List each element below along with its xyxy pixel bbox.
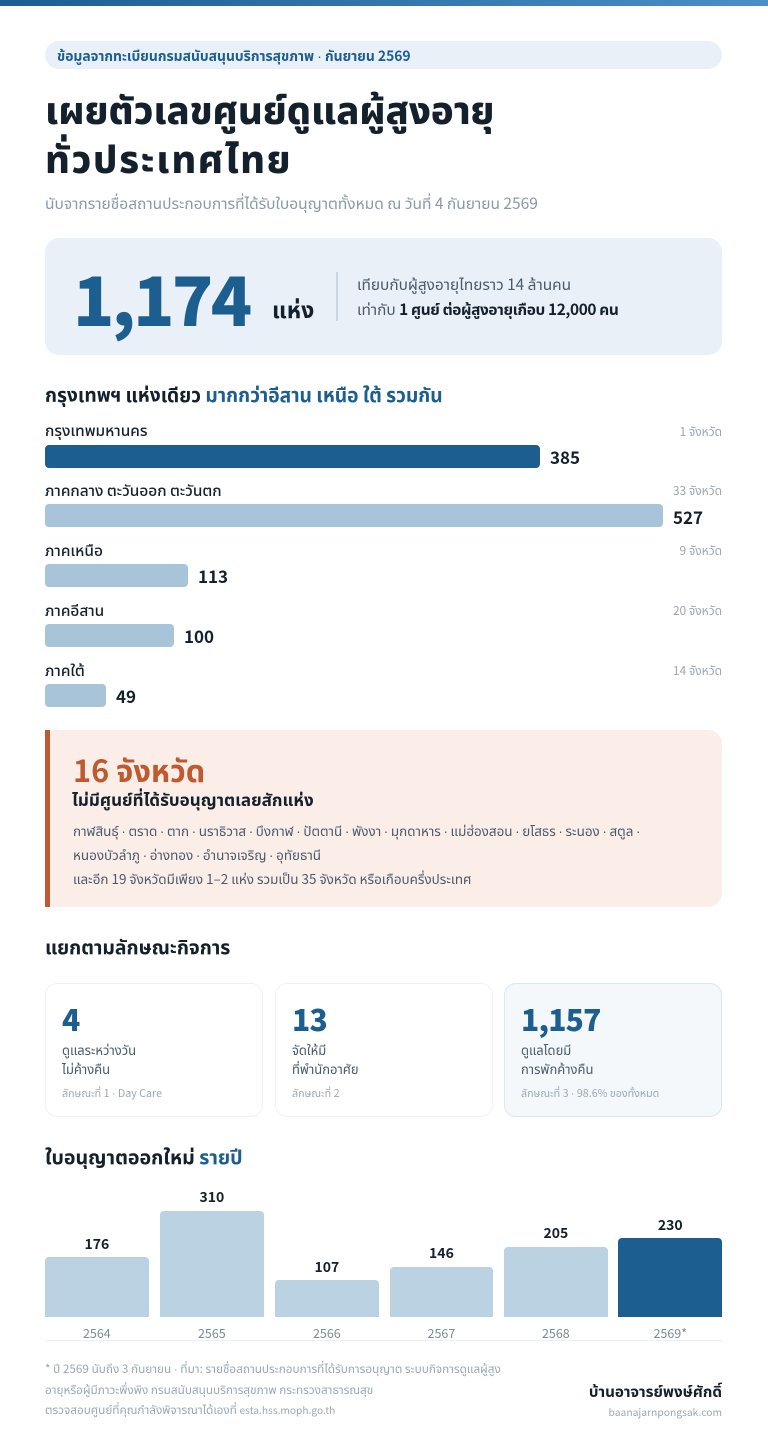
row: North [45, 539, 722, 588]
title: เผยตัวเลขศูนย์ดูแลผู้สูงอายุ [45, 80, 494, 135]
row: North: 9 จังหวัด [679, 542, 722, 559]
card: overnight: 1,157 [521, 996, 601, 1040]
divider note: เทียบกับผู้สูงอายุไทยราว 14 ล้านคน [357, 273, 571, 295]
row: Isan: 100 [184, 623, 214, 648]
source tag: ข้อมูลจากทะเบียนกรมสนับสนุนบริการสุขภาพ · กันยายน 2569 [57, 45, 411, 65]
footnote [45, 1360, 501, 1418]
column chart: yearly licences: 205 [543, 1223, 568, 1243]
row: Central: 33 จังหวัด [673, 482, 722, 499]
heading: yearly: ใบอนุญาตออกใหม่ รายปี [45, 1141, 243, 1170]
column 2566 [275, 1257, 379, 1342]
row: Isan [45, 599, 722, 648]
card: day care: 4 [62, 996, 79, 1040]
row: Central: ภาคกลาง ตะวันออก ตะวันตก [45, 479, 222, 501]
row: South [45, 659, 722, 708]
column chart: yearly licences: 146 [429, 1243, 454, 1263]
callout: provinces without centres [45, 730, 722, 907]
column 2568 [504, 1223, 608, 1342]
brand name: บ้านอาจารย์พงษ์ศักดิ์ [589, 1380, 722, 1402]
footnote: ตรวจสอบศูนย์ที่คุณกำลังพิจารณาได้เองที่ esta.hss.moph.go.th [45, 1401, 335, 1418]
province list: กาฬสินธุ์ · ตราด · ตาก · นราธิวาส · บึงกาฬ · ปัตตานี · พังงา · มุกดาหาร · แม่ฮ่องสอน · ยโสธร · ระนอง · สตูล · [73, 820, 640, 840]
title [45, 80, 494, 184]
divider note: เท่ากับ 1 ศูนย์ ต่อผู้สูงอายุเกือบ 12,000 คน [357, 298, 618, 320]
footnote: อายุหรือผู้มีภาวะพึ่งพิง กรมสนับสนุนบริการสุขภาพ กระทรวงสาธารณสุข [45, 1381, 373, 1398]
heading: business type: แยกตามลักษณะกิจการ [45, 931, 230, 960]
column 2567 [390, 1243, 493, 1342]
column chart: yearly licences: 107 [314, 1257, 339, 1277]
column chart: yearly licences: 310 [199, 1187, 224, 1207]
row: Central [45, 479, 722, 529]
callout heading: ไม่มีศูนย์ที่ได้รับอนุญาตเลยสักแห่ง [72, 786, 314, 811]
row: North: ภาคเหนือ [45, 539, 103, 561]
column chart: yearly licences: 2566 [313, 1323, 341, 1342]
column 2565 [160, 1187, 264, 1342]
row: South: 49 [116, 683, 136, 708]
title: ทั่วประเทศไทย [45, 129, 292, 184]
column chart: yearly licences: 2565 [198, 1323, 226, 1342]
card: residence: จัดให้มี [292, 1040, 326, 1059]
card: residence: ลักษณะที่ 2 [292, 1086, 340, 1101]
card: day care: ลักษณะที่ 1 · Day Care [62, 1086, 162, 1101]
row: Bangkok: 1 จังหวัด [679, 423, 722, 440]
card: overnight: ดูแลโดยมี [521, 1040, 571, 1059]
card: day care [45, 983, 263, 1117]
card: residence: ที่พำนักอาศัย [292, 1059, 359, 1078]
column 2569 [618, 1215, 722, 1342]
column chart: yearly licences: 2567 [428, 1323, 455, 1342]
column chart: yearly licences: 176 [84, 1234, 109, 1254]
province list [73, 820, 640, 888]
column chart: yearly licences: 2564 [83, 1323, 111, 1342]
bar chart: regions [45, 419, 722, 708]
province list: และอีก 19 จังหวัดมีเพียง 1–2 แห่ง รวมเป็น 35 จังหวัด หรือเกือบครึ่งประเทศ [73, 868, 472, 888]
subtitle: นับจากรายชื่อสถานประกอบการที่ได้รับใบอนุญาตทั้งหมด ณ วันที่ 4 กันยายน 2569 [45, 192, 538, 214]
footnote: * ปี 2569 นับถึง 3 กันยายน · ที่มา: รายชื่อสถานประกอบการที่ได้รับการอนุญาต ระบบกิจการดูแลผู้สูง [45, 1360, 501, 1377]
row: Isan: ภาคอีสาน [45, 599, 104, 621]
row: Bangkok: 385 [550, 444, 580, 469]
panel: headline total [45, 238, 722, 355]
divider note [336, 272, 618, 321]
row: Bangkok: กรุงเทพมหานคร [45, 419, 148, 441]
card: overnight [504, 983, 722, 1117]
unit: แห่ง [272, 291, 314, 325]
card: day care: ไม่ค้างคืน [62, 1059, 110, 1078]
card: day care: ดูแลระหว่างวัน [62, 1040, 136, 1059]
row: Isan: 20 จังหวัด [673, 602, 722, 619]
card: overnight: ลักษณะที่ 3 · 98.6% ของทั้งหมด [521, 1086, 659, 1101]
card: overnight: การพักค้างคืน [521, 1059, 593, 1078]
heading: regions: กรุงเทพฯ แห่งเดียว มากกว่าอีสาน เหนือ ใต้ รวมกัน [45, 380, 443, 408]
column chart: yearly licences: 2568 [542, 1323, 570, 1342]
source tag [45, 41, 722, 69]
row: South: 14 จังหวัด [673, 662, 722, 679]
brand url: baanajarnpongsak.com [609, 1404, 722, 1419]
row: Bangkok [45, 419, 722, 469]
column chart: yearly licences: 2569* [653, 1323, 687, 1342]
callout number: 16 จังหวัด [73, 746, 205, 791]
column chart: yearly licences: 230 [658, 1215, 683, 1235]
top gradient band [0, 0, 768, 6]
card: residence: 13 [292, 996, 327, 1040]
column 2564 [45, 1234, 149, 1342]
row: North: 113 [198, 563, 228, 588]
big number: 1,174 [73, 247, 250, 346]
row: South: ภาคใต้ [45, 659, 85, 681]
province list: หนองบัวลำภู · อ่างทอง · อำนาจเจริญ · อุทัยธานี [73, 844, 321, 864]
row: Central: 527 [673, 504, 703, 529]
card: residence [275, 983, 493, 1117]
